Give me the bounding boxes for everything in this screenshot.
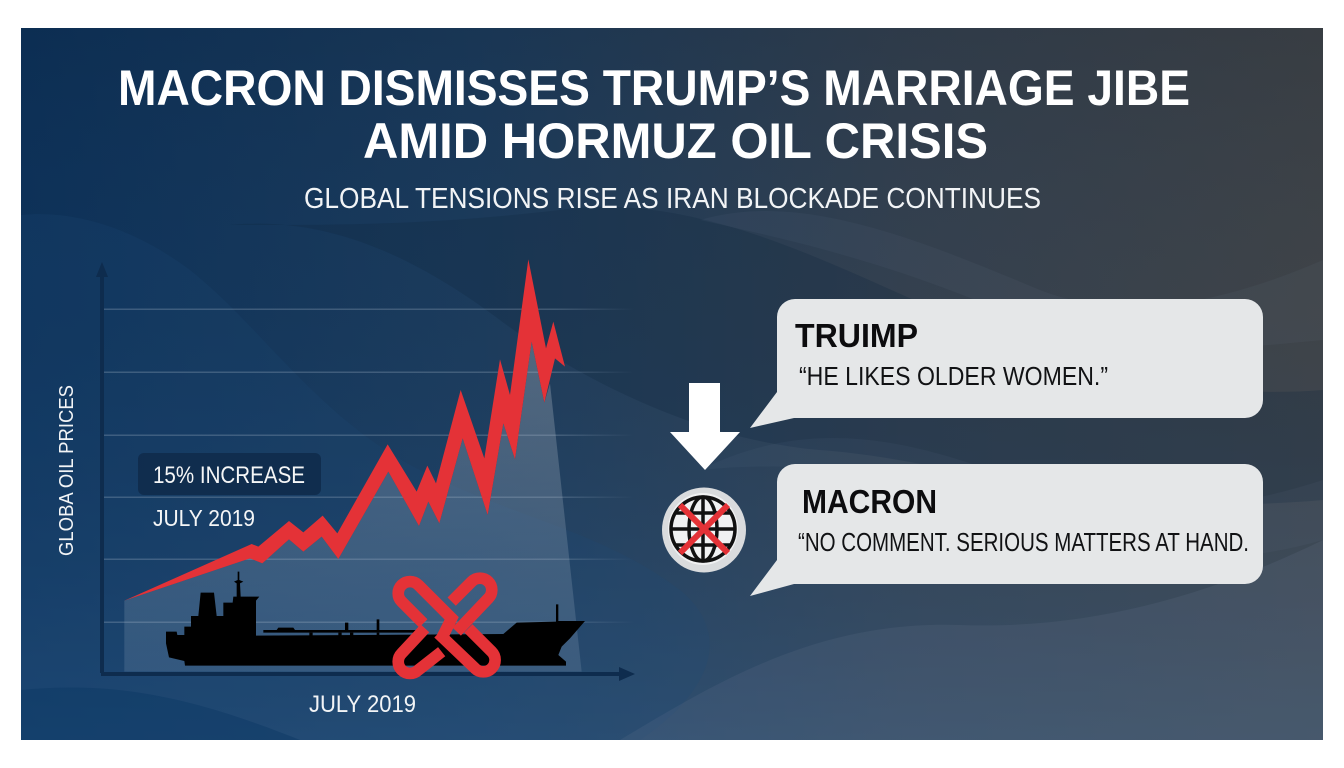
speech bubble: Trump: TRUIMP bbox=[795, 317, 918, 354]
speech bubble: Trump: “HE LIKES OLDER WOMEN.” bbox=[799, 361, 1108, 391]
red price line bbox=[124, 259, 565, 601]
y axis arrow bbox=[96, 262, 108, 673]
subtitle: GLOBAL TENSIONS RISE AS IRAN BLOCKADE CONTINUES bbox=[304, 183, 1041, 215]
chart grid lines and area under the line bbox=[104, 308, 634, 672]
icon: oil tanker silhouette bbox=[166, 572, 585, 666]
icon: crossed-out globe bbox=[662, 488, 746, 572]
x axis label: JULY 2019 bbox=[309, 691, 416, 718]
callout: 15% increase: 15% INCREASE bbox=[153, 462, 305, 489]
x axis arrow bbox=[101, 667, 635, 681]
speech bubble: Trump bbox=[750, 299, 1263, 428]
callout: 15% increase bbox=[138, 453, 321, 531]
title: AMID HORMUZ OIL CRISIS bbox=[363, 113, 988, 169]
y axis label: GLOBA OIL PRICES bbox=[56, 385, 78, 556]
speech bubble: Macron bbox=[750, 464, 1263, 596]
arrow: down bbox=[670, 383, 740, 470]
title bbox=[118, 60, 1190, 169]
icon: broken chain X bbox=[398, 578, 495, 673]
chart: global oil prices bbox=[56, 259, 635, 718]
speech bubble: Macron: MACRON bbox=[802, 483, 937, 520]
title: MACRON DISMISSES TRUMP’S MARRIAGE JIBE bbox=[118, 60, 1190, 116]
callout: 15% increase: JULY 2019 bbox=[153, 505, 255, 531]
